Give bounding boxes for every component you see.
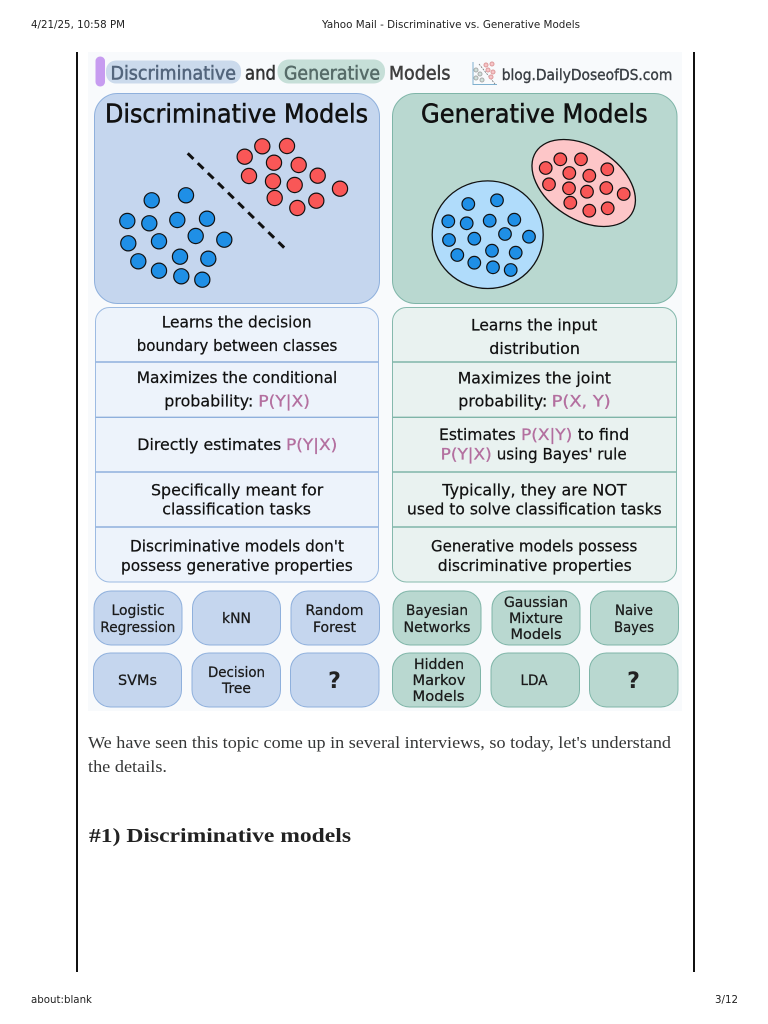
- print header: [31, 18, 580, 31]
- generative model chips: ?: [627, 669, 640, 694]
- blue distribution: [432, 181, 543, 288]
- row text: Learns the input: [471, 316, 597, 335]
- generative model chips: Models: [510, 627, 562, 643]
- decision boundary: [188, 153, 287, 251]
- infographic title bar: and: [245, 63, 276, 84]
- generative model chips: Models: [412, 689, 464, 705]
- row text: probability:: [164, 392, 253, 411]
- panel: discriminative properties: [96, 308, 378, 582]
- infographic title bar: Generative: [284, 63, 380, 84]
- row text: Specifically meant for: [151, 481, 324, 500]
- red points: [237, 138, 348, 216]
- panel: discriminative scatter: [94, 94, 380, 304]
- discriminative model chips: Regression: [100, 620, 175, 636]
- generative model chips: [392, 591, 678, 707]
- print footer: 3/12: [715, 993, 738, 1006]
- generative model chips: Bayesian: [406, 603, 468, 619]
- row text: Estimates: [439, 425, 516, 444]
- generative model chips: Networks: [404, 620, 470, 636]
- red distribution: [516, 122, 651, 244]
- generative model chips: Markov: [412, 673, 466, 689]
- discriminative model chips: Decision: [208, 665, 265, 681]
- row text: Learns the decision: [162, 313, 312, 332]
- row text: P(Y|X): [441, 444, 492, 463]
- discriminative model chips: Logistic: [112, 603, 165, 619]
- row text: Maximizes the conditional: [137, 368, 337, 387]
- blue points: [120, 188, 232, 287]
- blue points: [442, 194, 535, 276]
- row text: possess generative properties: [121, 556, 353, 575]
- red points: [539, 153, 630, 217]
- page frame lines: [76, 52, 695, 972]
- row text: discriminative properties: [438, 556, 632, 575]
- row text: Directly estimates: [137, 435, 281, 454]
- body paragraph: the details.: [88, 757, 167, 776]
- heading: Generative Models: Generative Models: [421, 100, 648, 130]
- row text: [407, 316, 662, 575]
- row text: P(Y|X): [258, 392, 310, 411]
- heading: Discriminative Models: Discriminative Models: [105, 100, 368, 130]
- row text: using Bayes' rule: [497, 444, 627, 463]
- row text: P(Y|X): [286, 435, 337, 454]
- generative model chips: Gaussian: [504, 595, 568, 611]
- row text: Generative models possess: [431, 537, 637, 556]
- infographic: [88, 52, 682, 711]
- infographic title bar: Models: [389, 63, 450, 84]
- discriminative model chips: Tree: [221, 681, 251, 697]
- row text: Typically, they are NOT: [441, 481, 627, 500]
- generative model chips: Hidden: [414, 657, 464, 673]
- discriminative model chips: Forest: [313, 620, 356, 636]
- row text: classification tasks: [162, 499, 311, 518]
- body paragraph: We have seen this topic come up in several interviews, so today, let's understand: [88, 733, 672, 752]
- row text: Maximizes the joint: [458, 368, 611, 387]
- generative model chips: LDA: [520, 673, 548, 689]
- section heading: #1) Discriminative models: [89, 825, 351, 847]
- row text: used to solve classification tasks: [407, 499, 662, 518]
- row text: to find: [578, 425, 629, 444]
- row text: [121, 313, 353, 575]
- generative model chips: Bayes: [614, 620, 654, 636]
- generative model chips: Naive: [615, 603, 653, 619]
- row text: P(X|Y): [521, 425, 572, 444]
- row text: distribution: [489, 339, 580, 358]
- discriminative model chips: [94, 591, 380, 707]
- discriminative model chips: ?: [328, 669, 341, 694]
- body paragraph: [88, 733, 672, 776]
- panel: generative scatter: [392, 94, 677, 304]
- discriminative model chips: Random: [306, 603, 364, 619]
- discriminative model chips: kNN: [222, 611, 251, 627]
- print footer: about:blank: [31, 993, 93, 1006]
- print footer: [31, 993, 738, 1006]
- print header: Yahoo Mail - Discriminative vs. Generative Models: [321, 18, 580, 31]
- row text: boundary between classes: [137, 336, 337, 355]
- blog url: blog.DailyDoseofDS.com: [502, 66, 672, 84]
- infographic title bar: [96, 56, 450, 86]
- infographic title bar: Discriminative: [110, 63, 236, 84]
- print header: 4/21/25, 10:58 PM: [31, 18, 125, 31]
- generative model chips: Mixture: [509, 611, 563, 627]
- row text: probability:: [458, 392, 547, 411]
- icon: blog logo scatter: [473, 62, 497, 84]
- panel: generative properties: [392, 308, 676, 582]
- row text: Discriminative models don't: [130, 537, 344, 556]
- discriminative model chips: SVMs: [118, 673, 157, 689]
- row text: P(X, Y): [552, 392, 611, 411]
